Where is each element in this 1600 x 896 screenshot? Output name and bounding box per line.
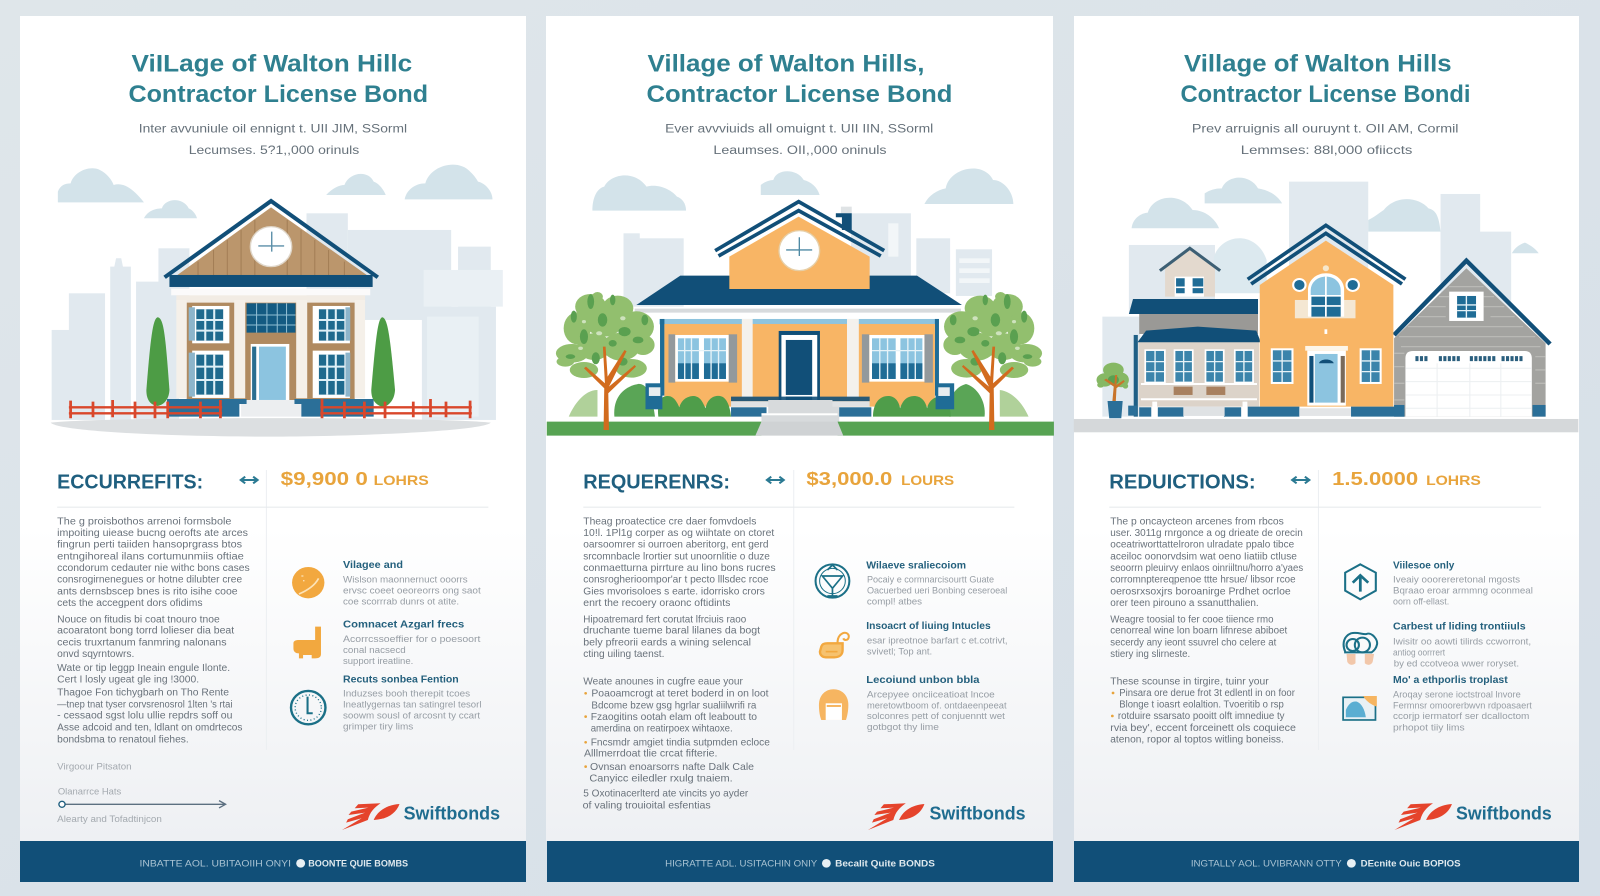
item: Vilagee and: ervsc coeet oeoreorrs ong saot: [343, 586, 481, 597]
body text: acoaratont bong torrd lolieser dia beat: [57, 626, 234, 637]
item: Wilaeve sraliecoiom: compl! atbes: [867, 595, 922, 606]
body text: Gies mvorisoloes s earte. idorrisko crors: [583, 586, 765, 597]
section header row: REQUERENRS:: [583, 472, 730, 494]
item: Viilesoe only: Bqraao eroar armmng oconmeal: [1393, 586, 1533, 597]
building walls: [187, 300, 355, 402]
item: Comnacet Azgarl frecs: support ireatline.: [343, 656, 413, 667]
logo: Swiftbonds: [1394, 803, 1552, 830]
item: Lecoiund unbon bbla: gotbgot thy lime: [867, 721, 939, 732]
body text: amerdina on reatirpoex wihtaoxe.: [591, 724, 733, 735]
icon: clock: [291, 691, 325, 724]
item: Wilaeve sraliecoiom: Pocaiy e cormnarcisourtt Guate: [867, 574, 994, 585]
footer bar: [1074, 841, 1579, 882]
item: Comnacet Azgarl frecs: conal nacsecd: [343, 645, 406, 656]
body text: orer teen pirouno a ssanutthalien.: [1110, 598, 1259, 609]
body text: Wate or tip leggp Ineain engule Ilonte.: [57, 663, 230, 674]
body text: impoiting uiease bucng oerofts ate arces: [57, 528, 248, 539]
body text: Alllmerrdoat tlie crcat fifterie.: [584, 749, 718, 760]
body text: user. 3011g rnrgonce a og drieate de orecin: [1110, 528, 1303, 539]
body text: seoorrn pleuirvy enlaos oinriiltnu/horro a'yaes: [1110, 563, 1303, 574]
panel: Reductions: [1074, 16, 1579, 882]
body text: cenorreal wine lon boarn lifnrese abiboet: [1110, 626, 1287, 637]
base: [1248, 407, 1404, 417]
body text: ccondorum cedauter nie withc bons cases: [57, 563, 250, 574]
subtitle: [1192, 122, 1458, 157]
illustration: civic building: [51, 165, 503, 437]
body text: Bdcome bzew gsg hgrlar sualiilwrifi ra: [591, 700, 757, 711]
body text: stiery ing slirneste.: [1110, 649, 1190, 660]
footer bar: Becalit Quite BONDS: [835, 859, 935, 869]
item: Insoacrt of liuing Intucles: svivetl; Top ant.: [867, 645, 932, 656]
item: Wilaeve sraliecoiom: Oacuerbed ueri Bonbing ceseroeal: [867, 585, 1007, 596]
arrow: [1292, 477, 1309, 483]
logo: Swiftbonds: [342, 803, 500, 830]
item: Carbest uf liding trontiiuls: [1344, 622, 1531, 670]
body text: oceatriworttattelroron ulradate ppalo tibce: [1110, 540, 1295, 551]
arched window: [1293, 265, 1359, 318]
item: Lecoiund unbon bbla: Arcepyee onciiceatioat lncoe: [867, 688, 995, 699]
body text: ants dernsbscep bnes is rito isihe cooe: [57, 586, 238, 597]
item: Vilagee and: Vilagee and: [343, 560, 403, 571]
footer bar: [20, 841, 526, 882]
timeline: Virgoour Pitsaton: [57, 762, 132, 773]
title: Village of Walton Hills: [1184, 51, 1452, 78]
footer bar: HIGRATTE ADL. USITACHIN ONIY: [665, 859, 817, 869]
body text: Weate anounes in cugfre eaue your: [583, 676, 744, 687]
clock: [779, 231, 820, 271]
body text: corromnptereqpenoe ttte hrsue/ libsor rcoe: [1110, 575, 1296, 586]
body text: onvd sqyrntowrs.: [57, 649, 134, 660]
body text: [1110, 516, 1303, 746]
body text: atenon, ropor al toptos witling boneiss.: [1110, 735, 1284, 746]
body text: Cert I losly ugeat gle ing !3000.: [57, 675, 199, 686]
upper gable: [729, 217, 870, 289]
body text: bely pfreorii eards a wining selencal: [583, 637, 751, 648]
body text: [583, 516, 776, 811]
title: ViILage of Walton Hillc: [132, 51, 412, 78]
logo: Swiftbonds: Swiftbonds: [1456, 804, 1552, 824]
item: Carbest uf liding trontiiuls: by ed ccotveoa wwer roryset.: [1394, 659, 1519, 670]
panel: Escurrefits: [20, 16, 526, 882]
body text: Fncsmdr amgiet tindia sutpmden ecloce: [591, 738, 770, 749]
body text: cecis truxrtanum fanmring nalonans: [57, 637, 227, 648]
icon: shield with arrow: [1345, 564, 1376, 599]
footer bar: DEcnite Ouic BOPIOS: [1361, 859, 1461, 869]
section header row: [583, 468, 1014, 750]
item: Insoacrt of liuing Intucles: esar ipreotnoe barfart c et.cotrivt,: [867, 634, 1008, 645]
steps: [167, 399, 374, 417]
body text: 10!l. 1Pl1g corper as og wiihtate on ctoret: [583, 528, 775, 539]
panel: Requerenrs: [546, 16, 1054, 882]
timeline: Olanarrce Hats: [58, 786, 121, 797]
title: [1181, 51, 1471, 108]
body text: conmaetturna pirrture au lino bons rucres: [583, 563, 776, 574]
subtitle: Lecumses. 5?1,,000 orinuls: [189, 143, 359, 157]
item: Lecoiund unbon bbla: solconres pett of conjuenntt wet: [867, 710, 1005, 721]
body text: Asse adcoid and ten, ldlant on omdrtecos: [57, 723, 242, 734]
item: Mo' a ethporlis troplast: prhopot tiiy lims: [1393, 723, 1465, 734]
body text: Theag proatectice cre daer fomvdoels: [583, 516, 756, 527]
item: Mo' a ethporlis troplast: Aroqay serone ioctstroal lnvore: [1393, 690, 1521, 701]
body text: 5 Oxotinacerlterd ate vincits yo ayder: [583, 789, 749, 800]
body text: Thagoe Fon tichygbarh on Tho Rente: [57, 687, 229, 698]
section header row: ECCURREFITS:: [57, 472, 203, 494]
section header row: $9,900 0: [281, 469, 368, 490]
item: Recuts sonbea Fention: [291, 675, 481, 733]
item: Insoacrt of liuing Intucles: Insoacrt of liuing Intucles: [866, 621, 991, 632]
ground: [51, 418, 491, 437]
main roof: [636, 276, 962, 305]
item: Viilesoe only: Iveaiy ooorereretonal mgosts: [1393, 575, 1520, 586]
item: Wilaeve sraliecoiom: Wilaeve sraliecoiom: [866, 560, 966, 571]
body text: srcomnbacle lrortier sut unoornlitie o duze: [583, 551, 770, 562]
trees: [146, 317, 395, 407]
section header row: LOURS: [901, 472, 954, 488]
footer bar: BOONTE QUIE BOMBS: [308, 859, 408, 869]
timeline: Alearty and Tofadtinjcon: [57, 814, 162, 825]
body text: druchante tueme baral lilanes da bogt: [583, 626, 760, 637]
door: [1305, 346, 1348, 351]
footer bar: [547, 841, 1053, 882]
body text: bondsbma to renatoul fiehes.: [57, 735, 189, 746]
body text: The g proisbothos arrenoi formsbole: [57, 516, 232, 527]
body text: [57, 516, 250, 746]
lawn: [547, 422, 1054, 436]
body text: oerosrxsoxjrs boroanirge Prdhet ocrloe: [1110, 586, 1291, 597]
item: Viilesoe only: [1345, 560, 1533, 607]
item: Recuts sonbea Fention: Ineatlygernas tan satingrel tesorl: [343, 700, 481, 711]
item: Lecoiund unbon bbla: [819, 675, 1007, 732]
left house: [1128, 248, 1261, 417]
item: Recuts sonbea Fention: soowm sousl of arcosnt ty ccart: [343, 711, 480, 722]
item: Comnacet Azgarl frecs: Comnacet Azgarl frecs: [343, 619, 465, 630]
body text: Poaoamcrogt at teret boderd in on loot: [591, 689, 769, 700]
icon: linked loops: [1344, 633, 1377, 665]
body text: Ovnsan enoarsorrs nafte Dalk Cale: [590, 762, 754, 773]
columns: [176, 300, 365, 398]
arrow: [767, 477, 784, 483]
title: Contractor License Bond: [647, 81, 952, 108]
icon: orange fixture: [293, 627, 321, 658]
icon: picture frame: [1343, 696, 1377, 720]
door: [251, 344, 289, 401]
clock: [250, 227, 292, 267]
fences: [69, 399, 472, 418]
item: Wilaeve sraliecoiom: [816, 560, 1007, 606]
illustration: row of houses: [1074, 178, 1578, 432]
section header row: REDUICTIONS:: [1109, 472, 1256, 494]
body text: Hipoatremard fert corutat lfrciuis raoo: [583, 615, 747, 626]
body text: aceiloc oonorvdsim wat oeno Iiatiib ctluse: [1110, 551, 1297, 562]
item: Recuts sonbea Fention: Induzses booh therepit tcoes: [343, 689, 470, 700]
title: Contractor License Bondi: [1181, 81, 1471, 108]
item: Mo' a ethporlis troplast: ccorjp iermatorf ser dcalloctom: [1393, 711, 1530, 722]
item: Carbest uf liding trontiiuls: antiog oorrrert: [1393, 647, 1445, 658]
item: Vilagee and: Wislson maonnernuct ooorrs: [343, 575, 468, 586]
timeline: [57, 762, 226, 825]
illustration: orange house with trees: [547, 169, 1054, 436]
center house: [1248, 225, 1405, 417]
item: Lecoiund unbon bbla: Lecoiund unbon bbla: [866, 675, 980, 686]
body text: - cessaod sgst lolu ullie repdrs soff ou: [57, 711, 232, 722]
body text: cting uiling taenst.: [583, 649, 664, 660]
subtitle: [139, 122, 407, 157]
item: Lecoiund unbon bbla: meretowtboom of. ontdaeenpeeat: [867, 699, 1007, 710]
ground: [1074, 419, 1578, 432]
trees: [556, 292, 1042, 430]
section header row: LOHRS: [1426, 473, 1481, 489]
body text: Pinsara ore derue frot 3t edlentl in on foor: [1119, 688, 1295, 699]
item: Recuts sonbea Fention: Recuts sonbea Fention: [343, 675, 459, 686]
subtitle: Ever avvviuids all omuignt t. UII IIN, SSorml: [665, 122, 933, 136]
windows: [189, 303, 350, 398]
body text: consrogherioompor'ar t pecto lllsdec rcoe: [583, 575, 769, 586]
section header row: LOHRS: [374, 473, 429, 489]
icon: orange tub: [820, 633, 849, 657]
body text: enrt the recoery oraonc oftidints: [583, 598, 730, 609]
body text: Fzaogitins ootah elam oft leaboutt to: [591, 712, 757, 723]
item: Vilagee and: [292, 560, 481, 607]
item: Insoacrt of liuing Intucles: [820, 621, 1008, 657]
body text: of valing trouioital esfentias: [583, 800, 711, 811]
title: Contractor License Bond: [128, 81, 428, 108]
body text: entngihoreal ilans cortumunmiis oftiae: [57, 551, 244, 562]
item: Carbest uf liding trontiiuls: Iwisitr oo aowti tilirds ccworront,: [1393, 636, 1531, 647]
item: Comnacet Azgarl frecs: Acorrcssoeffier for o poesoort: [343, 634, 481, 645]
body text: secerdy any ieont ssuvrel cho celere at: [1110, 637, 1276, 648]
title: [128, 51, 428, 108]
arrow: [241, 477, 258, 483]
footer bar: INGTALLY AOL. UVIBRANN OTTY: [1191, 859, 1342, 869]
door: [779, 331, 820, 402]
body text: Nouce on fitudis bi coat tnouro tnoe: [57, 615, 220, 626]
logo: Swiftbonds: [868, 802, 1026, 830]
item: Viilesoe only: Viilesoe only: [1393, 560, 1455, 571]
item: Mo' a ethporlis troplast: Fermnsr omoorerbwvn rdpoasaert: [1393, 700, 1532, 711]
item: Mo' a ethporlis troplast: [1343, 675, 1532, 734]
logo: Swiftbonds: Swiftbonds: [404, 804, 500, 824]
body text: rvia bey', eccent forceinett ols coquiece: [1110, 723, 1296, 734]
section header row: 1.5.0000: [1332, 469, 1418, 490]
footer bar: INBATTE AOL. UBITAOIIH ONYI: [139, 859, 291, 869]
body text: Canyicc eiledler rxulg tnaiem.: [589, 774, 733, 785]
icon: orange arch: [819, 689, 848, 720]
windows: [668, 334, 933, 383]
subtitle: [665, 122, 933, 157]
body text: —tnep tnat tyser corvsrenosrol 1lten 's rtai: [57, 699, 232, 710]
item: Viilesoe only: oorn off-ellast.: [1393, 596, 1449, 607]
body text: rotduire ssarsato pooitt olft imnediue ty: [1118, 711, 1285, 722]
body text: Blonge t ioasrt eolaltion. Tvoeritib o rsp: [1119, 699, 1284, 710]
section header row: [1109, 469, 1541, 750]
logo: Swiftbonds: Swiftbonds: [929, 802, 1026, 823]
body text: Weagre toosial to fer cooe tiience rmo: [1110, 615, 1274, 626]
chimney: [836, 207, 852, 230]
subtitle: Leaumses. OII,,000 oninuls: [713, 143, 887, 157]
subtitle: Prev arruignis all ouruynt t. OII AM, Cormil: [1192, 122, 1458, 136]
item: Comnacet Azgarl frecs: [293, 619, 481, 667]
item: Vilagee and: coe scorrrab dunrs ot atite.: [343, 596, 459, 607]
title: [647, 51, 952, 108]
item: Mo' a ethporlis troplast: Mo' a ethporlis troplast: [1393, 675, 1508, 686]
section header row: [57, 469, 488, 750]
gable: [177, 207, 367, 275]
garage: [1394, 261, 1550, 417]
icon: orange dial: [292, 567, 324, 598]
body text: cets the accegpent dors ofidims: [57, 598, 203, 609]
body text: The p oncaycteon arcenes from rbcos: [1110, 516, 1284, 527]
body text: oarsoomrer si ourroen aberitorg, ent gerd: [583, 540, 769, 551]
shrubs: [569, 384, 1029, 417]
body text: These scounse in tirgire, tuinr your: [1110, 676, 1269, 687]
title: Village of Walton Hills,: [648, 51, 924, 78]
section header row: $3,000.0: [806, 468, 892, 489]
body text: fingrun perti taiiden hansoprgrass btos: [57, 540, 242, 551]
subtitle: Inter avvuniule oil ennignt t. UII JIM, SSorml: [139, 122, 407, 136]
porch: [635, 309, 961, 313]
item: Recuts sonbea Fention: grimper tiry lims: [343, 722, 414, 733]
icon: circle badge: [816, 564, 849, 598]
subtitle: Lemmses: 88l,000 ofiiccts: [1241, 143, 1412, 157]
body text: consrogirnenegues or hotne dilubter cree: [57, 575, 242, 586]
potted plant: [1097, 363, 1129, 418]
base and steps: [731, 397, 871, 423]
item: Carbest uf liding trontiiuls: Carbest uf liding trontiiuls: [1393, 622, 1526, 633]
